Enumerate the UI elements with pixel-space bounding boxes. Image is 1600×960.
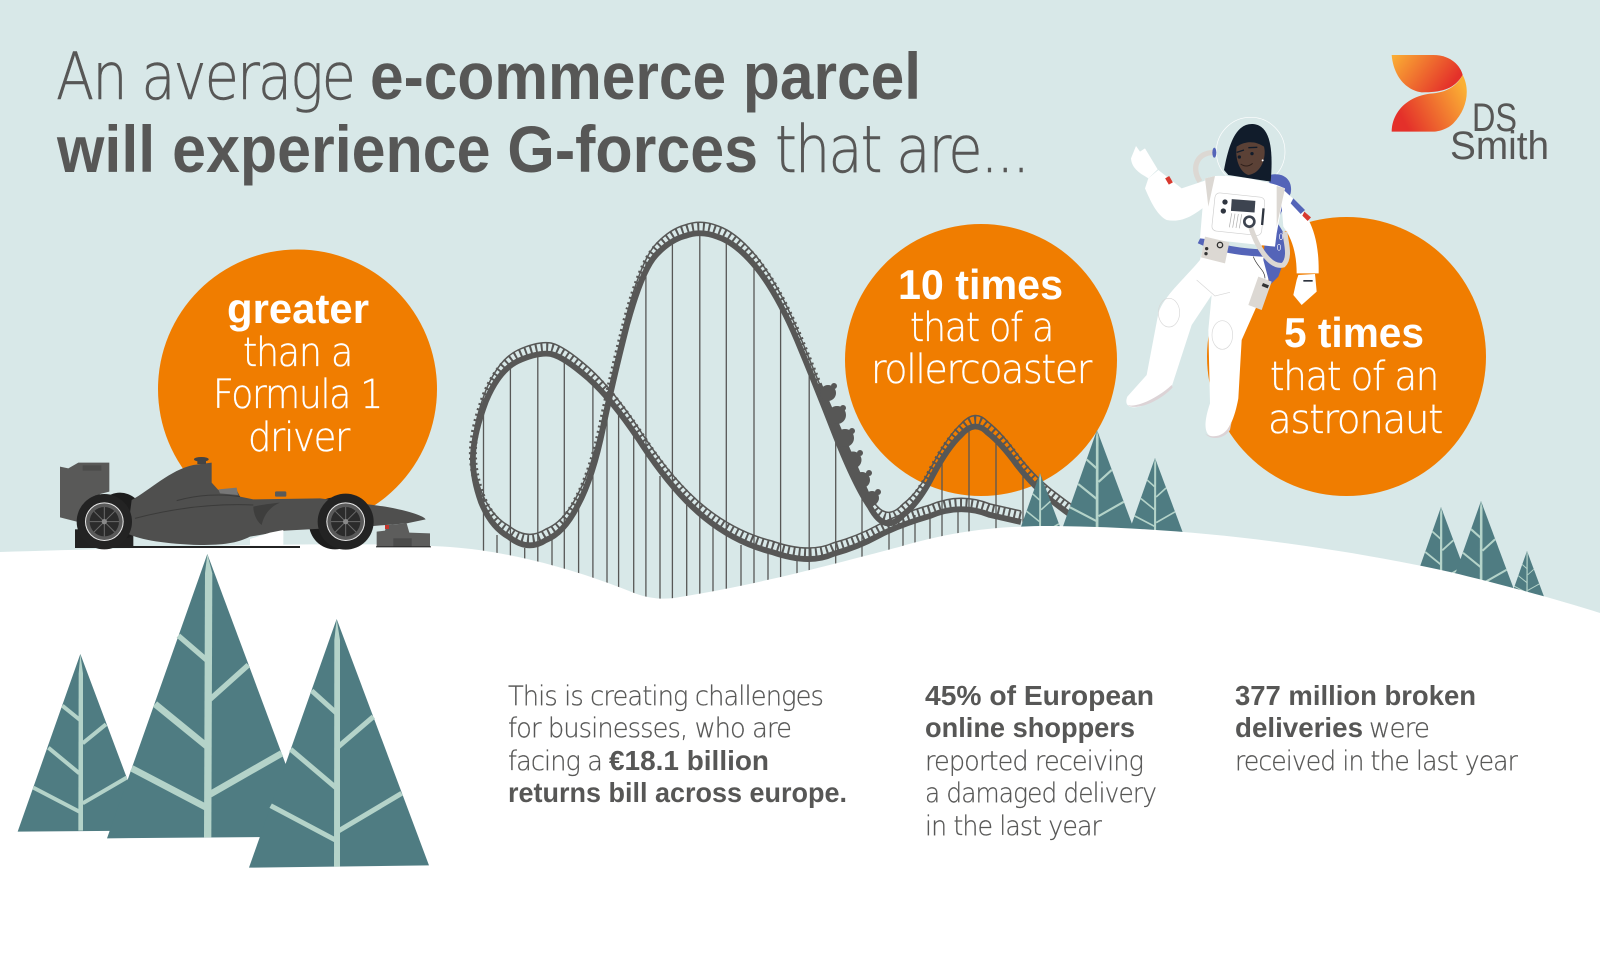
text block: damaged deliveries: 45% of European <box>925 680 1154 711</box>
large trees <box>18 554 429 868</box>
text block: returns bill: returns bill across europe. <box>508 777 847 808</box>
text block: damaged deliveries: online shoppers <box>925 712 1135 743</box>
text block: damaged deliveries: a damaged delivery <box>925 778 1156 809</box>
title: that are... <box>775 113 1028 188</box>
trees behind the hill: centre <box>1014 430 1184 546</box>
circle: astronaut: 5 times <box>1284 309 1424 356</box>
circle: Formula 1: driver <box>248 415 351 461</box>
astronaut: legs <box>1126 247 1270 438</box>
logo: DS Smith <box>1392 55 1549 168</box>
circle: Formula 1: greater <box>227 285 369 332</box>
logo: DS Smith: Smith <box>1450 124 1549 168</box>
logo: DS Smith: DS <box>1472 96 1517 140</box>
text block: returns bill: facing a <box>508 746 602 777</box>
astronaut <box>1126 117 1319 438</box>
title: e-commerce parcel <box>370 39 921 113</box>
text block: broken deliveries: 377 million broken <box>1235 680 1476 711</box>
tree: tall centre <box>107 554 313 838</box>
tree: right <box>249 619 429 868</box>
circle: rollercoaster: rollercoaster <box>871 347 1093 393</box>
trees behind the hill: right <box>1411 501 1544 599</box>
circle: astronaut: astronaut <box>1268 397 1442 443</box>
text block: returns bill: €18.1 billion <box>609 745 769 776</box>
text block: broken deliveries: were <box>1369 713 1429 744</box>
coaster cars <box>818 383 881 505</box>
text block: broken deliveries: received in the last year <box>1235 746 1519 777</box>
text block: returns bill: This is creating challenges <box>508 681 823 712</box>
astronaut: upper body <box>1131 117 1319 310</box>
circle: rollercoaster <box>845 224 1117 496</box>
title <box>56 39 1028 188</box>
tree: small left <box>18 654 147 832</box>
circle: Formula 1: Formula 1 <box>213 372 382 418</box>
circle: rollercoaster: 10 times <box>898 261 1063 308</box>
text block: broken deliveries <box>1235 680 1519 777</box>
text block: returns bill <box>508 681 847 808</box>
Formula 1 car <box>60 457 431 550</box>
text block: broken deliveries: deliveries <box>1235 712 1363 743</box>
circle: rollercoaster: that of a <box>910 305 1053 351</box>
rear wheel <box>77 494 132 549</box>
circle: astronaut <box>1207 217 1486 496</box>
circle: Formula 1 <box>158 250 437 528</box>
circle: Formula 1: than a <box>243 330 352 376</box>
circle: astronaut: that of an <box>1270 354 1438 400</box>
text block: damaged deliveries: reported receiving <box>925 746 1143 777</box>
white hill <box>0 526 1600 960</box>
title: An average <box>56 40 354 115</box>
title: will experience G-forces <box>56 112 758 186</box>
text block: returns bill: for businesses, who are <box>508 713 791 744</box>
front wheel <box>318 494 374 550</box>
text block: damaged deliveries <box>925 680 1156 842</box>
rollercoaster <box>473 222 1085 620</box>
text block: damaged deliveries: in the last year <box>925 811 1103 842</box>
